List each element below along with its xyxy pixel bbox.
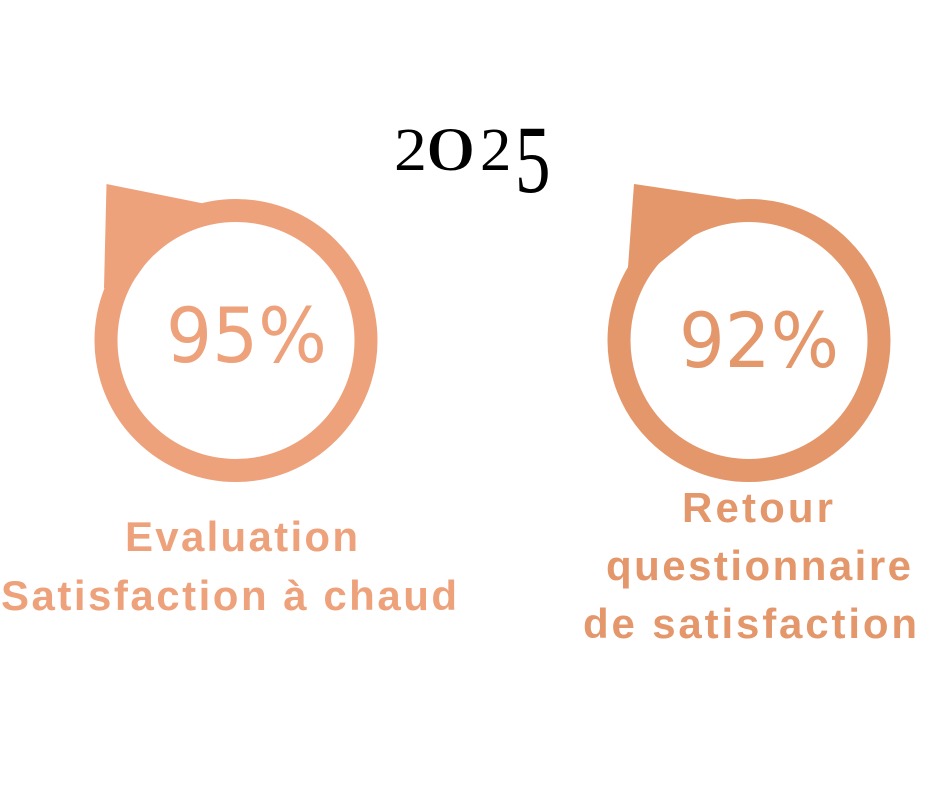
label: Retour questionnaire de satisfaction: de satisfaction (583, 600, 917, 647)
title: 2025: 0 (426, 117, 475, 184)
title: 2025: 2 (480, 117, 511, 184)
label: Retour questionnaire de satisfaction (583, 484, 917, 647)
value: 92%: 92% (679, 296, 839, 385)
title: 2025: 2 (394, 117, 427, 184)
title: 2025 (394, 106, 551, 213)
title: 2025: 5 (515, 106, 551, 213)
label: Retour questionnaire de satisfaction: questionnaire (606, 542, 911, 589)
label: Evaluation Satisfaction à chaud: Evaluation (125, 513, 358, 560)
panel: evaluation satisfaction (1, 184, 457, 619)
value: 95%: 95% (166, 291, 327, 380)
label: Evaluation Satisfaction à chaud: Satisfaction à chaud (1, 572, 457, 619)
gauge ring: 92% (619, 184, 879, 470)
gauge ring: 95% (104, 184, 366, 470)
panel: retour questionnaire (583, 184, 917, 647)
label: Retour questionnaire de satisfaction: Retour (682, 484, 833, 531)
label: Evaluation Satisfaction à chaud (1, 513, 457, 619)
